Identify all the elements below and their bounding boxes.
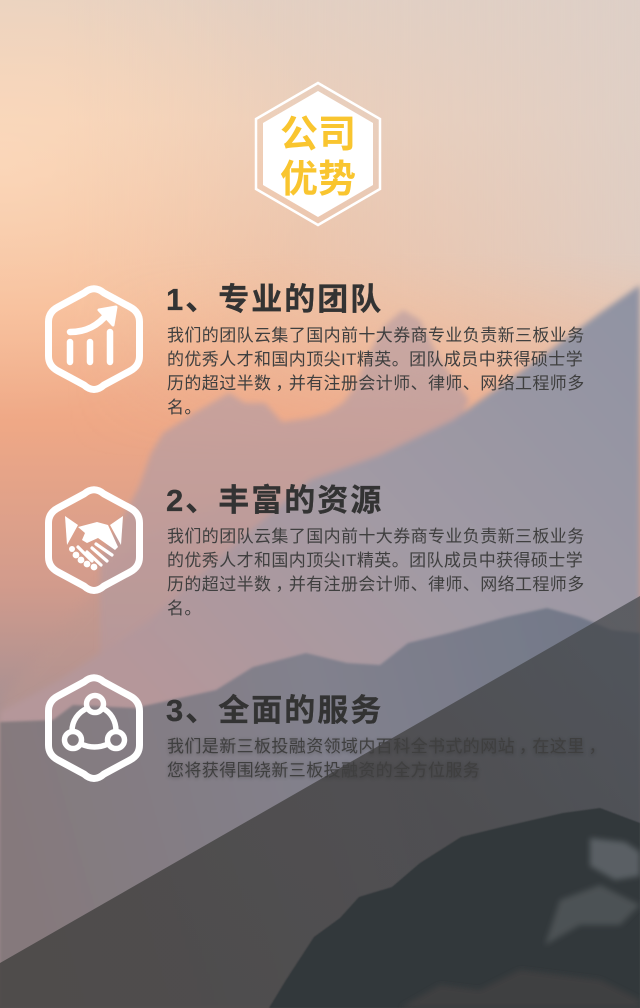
- text block: section 1: 名。: [167, 398, 202, 417]
- icon: growth chart hexagon: [45, 285, 143, 393]
- heading: section 2: 2、丰富的资源: [166, 483, 383, 518]
- heading: section 3: 3、全面的服务: [166, 693, 383, 728]
- text block: section 2: 名。: [167, 599, 202, 618]
- text block: section 2: [167, 527, 585, 618]
- badge: company advantage hexagon: [254, 82, 382, 226]
- text block: section 2: 的优秀人才和国内顶尖IT精英。团队成员中获得硕士学: [167, 551, 583, 570]
- text block: section 1: 历的超过半数，并有注册会计师、律师、网络工程师多: [167, 374, 585, 393]
- badge title text: [280, 114, 356, 201]
- text block: section 3: 您将获得围绕新三板投融资的全方位服务: [167, 761, 480, 780]
- text block: section 1: 的优秀人才和国内顶尖IT精英。团队成员中获得硕士学: [167, 350, 583, 369]
- heading: section 1: 1、专业的团队: [166, 282, 383, 317]
- text block: section 2: 历的超过半数，并有注册会计师、律师、网络工程师多: [167, 575, 585, 594]
- icon: connected circles hexagon: [45, 674, 143, 782]
- text block: section 2: 我们的团队云集了国内前十大券商专业负责新三板业务: [167, 527, 585, 546]
- text block: section 3: 我们是新三板投融资领域内百科全书式的网站，在这里，: [167, 737, 606, 756]
- text block: section 1: 我们的团队云集了国内前十大券商专业负责新三板业务: [167, 326, 585, 345]
- foreground rocky peak: [269, 808, 640, 1008]
- badge title text: 公司: [280, 114, 356, 156]
- badge title text: 优势: [280, 159, 356, 201]
- text block: section 1: [167, 326, 585, 417]
- dark diagonal overlay: [0, 596, 640, 1008]
- text block: section 3: [167, 737, 606, 780]
- icon: handshake hexagon: [45, 486, 143, 594]
